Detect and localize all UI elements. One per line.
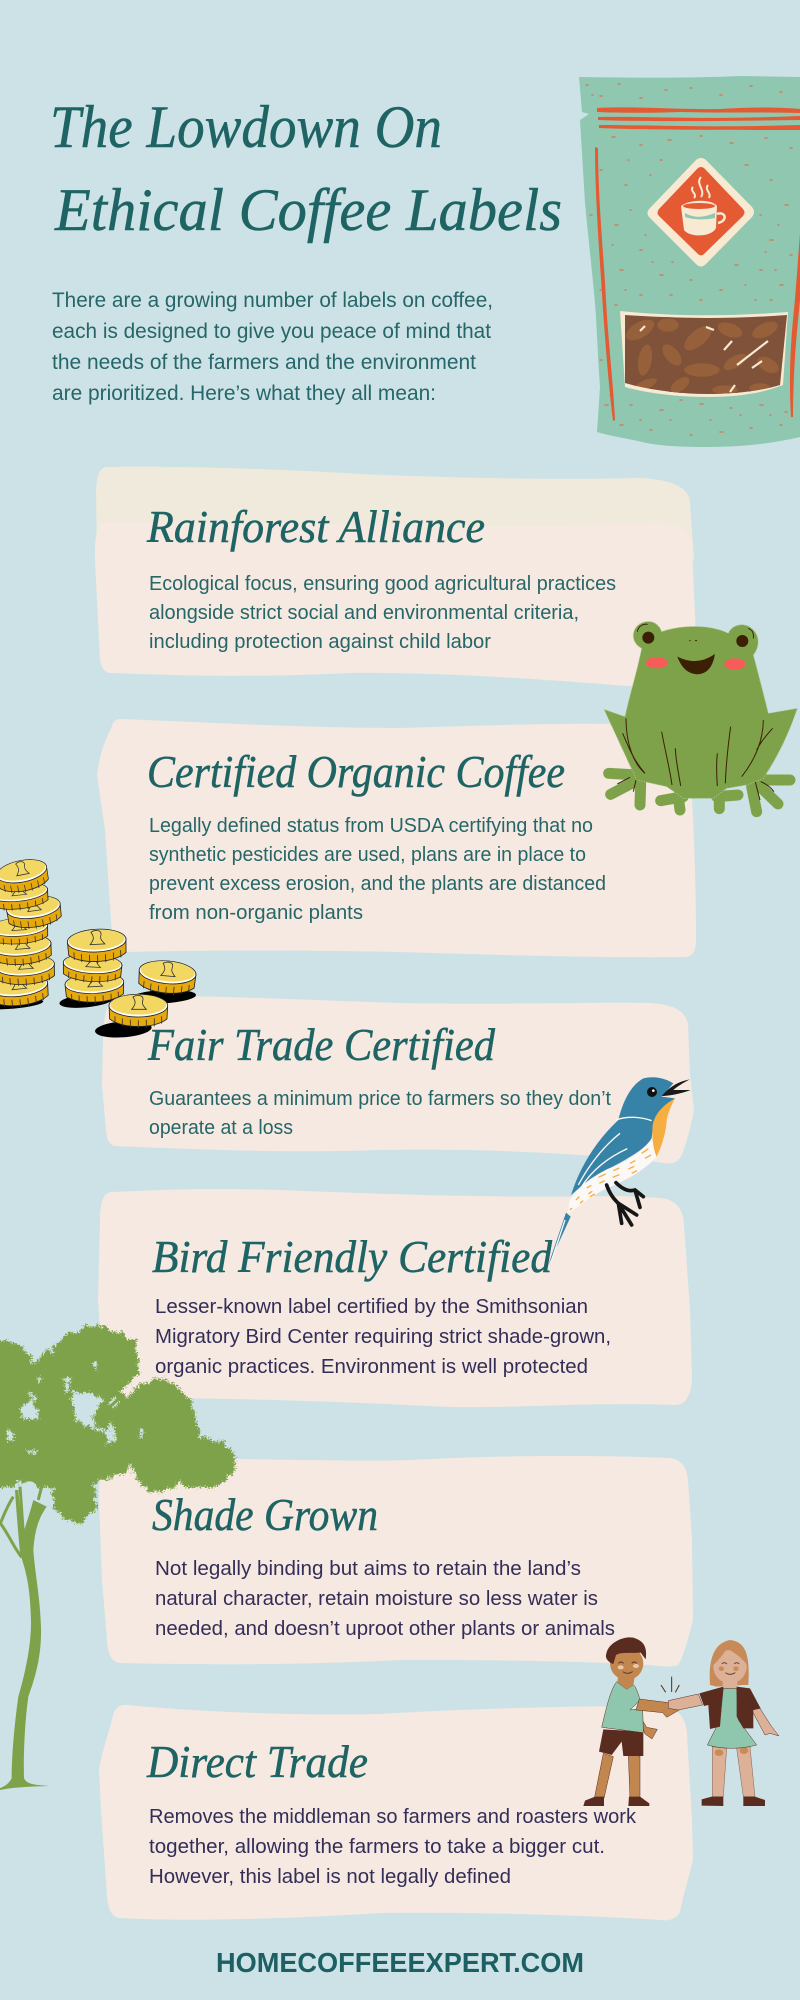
description: Guarantees a minimum price to farmers so they don’t	[149, 1088, 611, 1110]
description	[149, 815, 606, 924]
heading: Bird Friendly Certified	[152, 1232, 552, 1282]
description: needed, and doesn’t uproot other plants or animals	[155, 1618, 615, 1640]
boy head	[610, 1647, 643, 1680]
bag window with coffee beans	[620, 311, 788, 398]
heading: Fair Trade Certified	[147, 1020, 495, 1070]
description: Lesser-known label certified by the Smithsonian	[155, 1296, 588, 1318]
bird legs	[607, 1183, 643, 1225]
bird tail	[548, 1213, 571, 1265]
boy shirt	[602, 1682, 643, 1733]
icon: two people shaking hands	[583, 1637, 779, 1806]
girl face	[722, 1663, 739, 1674]
girl arm	[668, 1694, 703, 1710]
girl neck	[723, 1678, 737, 1690]
boy cheeks	[618, 1664, 639, 1669]
boy neck	[617, 1675, 635, 1689]
tree foliage	[0, 1327, 237, 1523]
title	[50, 94, 562, 243]
description: operate at a loss	[149, 1117, 293, 1139]
girl hair back	[710, 1640, 749, 1687]
description: However, this label is not legally defined	[149, 1866, 511, 1888]
frog brows and nostrils	[637, 624, 753, 641]
description	[149, 1088, 611, 1139]
icon: frog	[604, 622, 797, 812]
girl dress	[707, 1688, 757, 1748]
icon: bird	[548, 1077, 691, 1265]
bird breast	[652, 1098, 675, 1157]
frog mouth	[677, 654, 715, 674]
intro text: There are a growing number of labels on coffee,	[52, 289, 493, 312]
intro text: are prioritized. Here’s what they all mean:	[52, 382, 436, 405]
girl vest	[699, 1687, 761, 1729]
panel: Fair Trade Certified	[102, 996, 694, 1163]
icon: coffee bag	[579, 76, 800, 447]
description: prevent excess erosion, and the plants are distanced	[149, 873, 606, 895]
girl knees	[715, 1747, 748, 1756]
bird eye	[647, 1087, 657, 1097]
girl head	[713, 1650, 747, 1683]
panel body	[95, 521, 696, 688]
middle coin stack	[62, 928, 127, 1005]
frog body	[604, 622, 797, 798]
panel top tint	[96, 467, 694, 560]
boy free hand	[643, 1721, 657, 1739]
boy face	[618, 1662, 637, 1673]
description: including protection against child labor	[149, 631, 491, 653]
boy legs	[594, 1753, 640, 1798]
description: Not legally binding but aims to retain the land’s	[155, 1558, 581, 1580]
boy hair	[606, 1637, 646, 1664]
girl	[668, 1640, 779, 1806]
clap lines	[661, 1677, 679, 1692]
description: alongside strict social and environmental criteria,	[149, 602, 579, 624]
girl cheeks	[719, 1666, 739, 1671]
frog cheeks	[646, 657, 746, 670]
icon: tree	[0, 1327, 237, 1790]
panel: Bird Friendly Certified	[98, 1189, 692, 1407]
title: The Lowdown On	[50, 94, 442, 160]
intro text: the needs of the farmers and the environment	[52, 351, 476, 374]
boy shoes	[583, 1797, 649, 1806]
description: Ecological focus, ensuring good agricultural practices	[149, 573, 616, 595]
panel: Direct Trade	[99, 1705, 693, 1920]
girl legs	[712, 1747, 755, 1797]
heading: Direct Trade	[146, 1737, 368, 1787]
bag speckles	[586, 84, 797, 435]
frog leg lines	[617, 718, 774, 800]
description	[149, 573, 616, 653]
right coin	[137, 959, 197, 997]
tree trunk	[0, 1490, 49, 1790]
coin shadows	[0, 988, 196, 1039]
bag body	[579, 76, 800, 447]
girl other arm	[752, 1708, 779, 1736]
boy shorts	[599, 1729, 643, 1756]
title: Ethical Coffee Labels	[54, 177, 562, 243]
icon: gold coins	[0, 856, 197, 1039]
boy	[583, 1637, 679, 1806]
bird body	[571, 1077, 675, 1195]
left coin stack	[0, 856, 63, 1010]
bird chest marks	[570, 1149, 651, 1210]
panel: Certified Organic Coffee	[97, 719, 696, 957]
description: synthetic pesticides are used, plans are in place to	[149, 844, 586, 866]
panel: Rainforest Alliance	[95, 467, 696, 688]
bird wing lines	[552, 1117, 652, 1260]
girl bangs	[713, 1642, 747, 1665]
tree lower gaps	[4, 1481, 37, 1517]
bag side lines	[595, 147, 800, 421]
description: together, allowing the farmers to take a bigger cut.	[149, 1836, 605, 1858]
heading: Certified Organic Coffee	[147, 747, 565, 797]
heading: Shade Grown	[152, 1490, 378, 1540]
description	[155, 1296, 611, 1378]
description: Removes the middleman so farmers and roasters work	[149, 1806, 637, 1828]
label diamond	[648, 158, 754, 266]
tree branches	[0, 1395, 123, 1557]
intro text	[52, 289, 493, 405]
description: Migratory Bird Center requiring strict shade-grown,	[155, 1326, 611, 1348]
coffee cup icon	[681, 177, 725, 235]
description	[149, 1806, 637, 1888]
heading: Rainforest Alliance	[146, 502, 485, 552]
description: natural character, retain moisture so less water is	[155, 1588, 598, 1610]
frog toes	[609, 773, 790, 812]
bag top stripes	[597, 107, 800, 130]
footer website: HOMECOFFEEEXPERT.COM	[216, 1947, 584, 1978]
front coin	[109, 994, 168, 1028]
description: Legally defined status from USDA certifying that no	[149, 815, 593, 837]
bird belly	[568, 1138, 657, 1213]
bird beak	[662, 1079, 691, 1096]
description	[155, 1558, 615, 1640]
girl shoes	[702, 1797, 765, 1806]
panel: Shade Grown	[99, 1456, 693, 1666]
intro text: each is designed to give you peace of mind that	[52, 320, 491, 343]
description: organic practices. Environment is well protected	[155, 1356, 588, 1378]
boy arm	[636, 1699, 679, 1717]
description: from non-organic plants	[149, 902, 363, 924]
frog eyes	[642, 632, 748, 647]
